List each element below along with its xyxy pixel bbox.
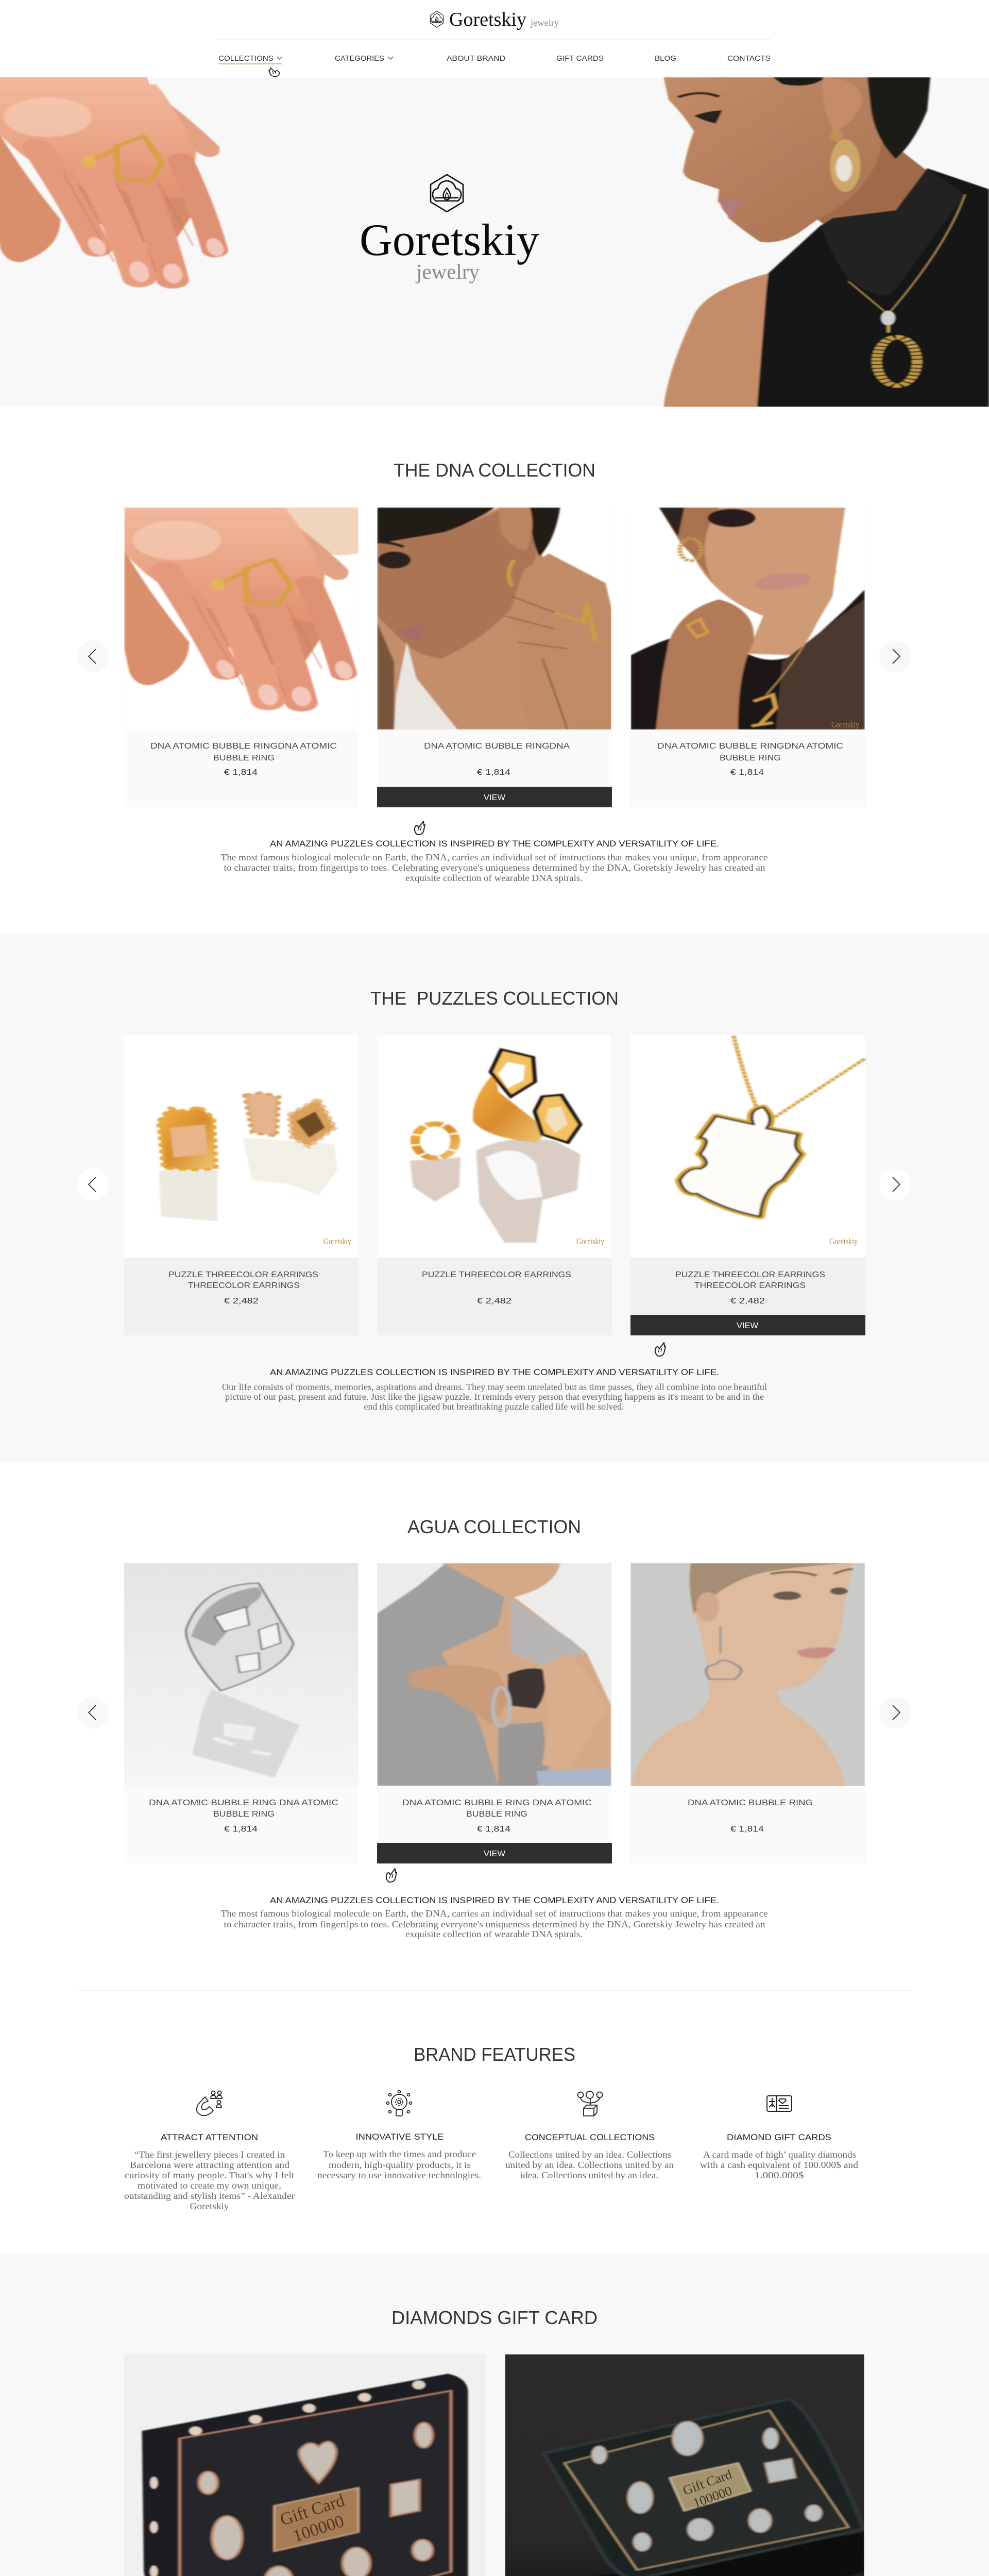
description: Our life consists of moments, memories, aspirations and dreams. They may seem unrelated but as time passes, they all combine into one beautiful: [222, 1382, 767, 1392]
gift card 1: Gift Card: [278, 2491, 347, 2530]
product card 3: Goretskiy: [831, 720, 859, 730]
icon: hand cursor: [269, 68, 279, 77]
product card 3: € 1,814: [730, 1825, 764, 1834]
button: view: [377, 787, 612, 807]
hero photo: woman in profile: [663, 77, 989, 407]
product card 2: € 2,482: [477, 1297, 511, 1306]
feature: conceptual collections: united by an idea. Collections united by an: [505, 2160, 674, 2170]
feature: diamond gift cards: DIAMOND GIFT CARDS: [727, 2132, 831, 2142]
arrow: previous: [77, 1168, 109, 1200]
icon: magnet and people: [197, 2091, 222, 2115]
description: to character traits, from fingertips to toes. Celebrating everyone's uniqueness determined by the DNA, Goretskiy Jewelry has created an: [224, 862, 765, 873]
product card 2: BUBBLE RING: [466, 1810, 527, 1819]
description: [220, 839, 768, 883]
product card 3: PUZZLE THREECOLOR EARRINGS: [675, 1270, 825, 1279]
icon: hand cursor: [415, 821, 425, 835]
product card 3: € 2,482: [730, 1297, 765, 1306]
logo: header: Goretskiy: [449, 9, 526, 30]
feature: attract attention: [124, 2091, 295, 2211]
product card 1: PUZZLE THREECOLOR EARRINGS: [168, 1270, 318, 1279]
arrow: previous: [77, 640, 109, 672]
button: view: VIEW: [737, 1321, 759, 1330]
heading: DIAMONDS GIFT CARD: [391, 2307, 598, 2328]
product card 2: PUZZLE THREECOLOR EARRINGS: [422, 1270, 571, 1279]
description: AN AMAZING PUZZLES COLLECTION IS INSPIRED BY THE COMPLEXITY AND VERSATILITY OF LIFE.: [270, 1895, 719, 1905]
feature: diamond gift cards: A card made of high’ quality diamonds: [703, 2149, 856, 2160]
description: The most famous biological molecule on Earth, the DNA, carries an individual set of instructions that makes you unique, from appearance: [220, 852, 768, 862]
navigation: [218, 54, 771, 64]
product card 2: [377, 507, 612, 807]
section: the puzzles collection: [77, 988, 911, 1412]
hero logo: Goretskiy: [360, 215, 539, 265]
hero logo: jewelry: [415, 260, 480, 283]
product card 2: Goretskiy: [578, 720, 605, 730]
product card 1: BUBBLE RING: [213, 1810, 275, 1819]
feature: attract attention: “The first jewellery pieces I created in: [134, 2149, 285, 2160]
feature: conceptual collections: [505, 2091, 674, 2180]
gift card 2: 100000: [691, 2483, 734, 2511]
arrow: next: [879, 1697, 911, 1728]
product card 3: Goretskiy: [829, 1236, 858, 1246]
product card 3: [630, 1035, 865, 1335]
section: agua collection: [77, 1516, 911, 1939]
heading: THE DNA COLLECTION: [394, 460, 595, 481]
gift card 2: Gift Card: [681, 2467, 734, 2498]
navigation: CONTACTS: [727, 54, 771, 63]
arrow: next: [879, 1168, 911, 1200]
feature: conceptual collections: idea. Collections united by an idea.: [520, 2170, 658, 2180]
feature: attract attention: Goretskiy: [190, 2201, 229, 2211]
product card 1: € 1,814: [224, 768, 258, 777]
product card 2: € 1,814: [477, 768, 510, 777]
navigation: CATEGORIES: [335, 54, 384, 63]
icon: light bulb with gear: [386, 2091, 412, 2116]
icon: hand cursor: [655, 1343, 666, 1356]
gift card 2: [504, 2354, 865, 2576]
description: [222, 1367, 767, 1412]
description: picture of our past, present and future. Just like the jigsaw puzzle. It reminds every person that everything happens as it's meant to be and in the: [225, 1392, 764, 1402]
product card 1: THREECOLOR EARRINGS: [188, 1281, 300, 1290]
navigation: ABOUT BRAND: [447, 54, 505, 63]
description: AN AMAZING PUZZLES COLLECTION IS INSPIRED BY THE COMPLEXITY AND VERSATILITY OF LIFE.: [270, 839, 719, 849]
product card 2: Goretskiy: [576, 1236, 604, 1246]
product card 3: € 1,814: [730, 768, 764, 777]
button: view: [377, 1843, 612, 1863]
product card 1: [124, 1563, 359, 1863]
section: the DNA collection: [77, 460, 911, 883]
hero photo: hand with ring: [0, 77, 226, 284]
feature: diamond gift cards: with a cash equivalent of 100.000$ and: [700, 2160, 858, 2170]
product card 2: [377, 1563, 612, 1863]
feature: attract attention: Barcelona were attracting attention and: [130, 2160, 289, 2170]
product card 2: [377, 1035, 612, 1335]
button: view: VIEW: [484, 793, 506, 802]
icon: gift card: [767, 2096, 792, 2111]
description: exquisite collection of wearable DNA spirals.: [405, 873, 583, 883]
navigation: COLLECTIONS: [218, 54, 274, 63]
feature: innovative style: INNOVATIVE STYLE: [355, 2132, 444, 2142]
gift card 1: 100000: [291, 2512, 347, 2546]
product card 3: [630, 507, 865, 776]
icon: box with sprouting ideas: [578, 2091, 603, 2116]
product card 1: DNA ATOMIC BUBBLE RING DNA ATOMIC: [149, 1799, 338, 1807]
product card 1: € 2,482: [224, 1297, 259, 1306]
logo: header: [430, 9, 559, 30]
arrow: previous: [77, 1697, 109, 1728]
product card 3: THREECOLOR EARRINGS: [694, 1281, 806, 1290]
section: brand features: [124, 2044, 858, 2211]
description: [220, 1895, 768, 1939]
product card 2: € 1,814: [477, 1825, 510, 1834]
icon: hand cursor: [386, 1869, 397, 1882]
product card 1: [124, 507, 359, 776]
feature: innovative style: modern, high-quality products, it is: [329, 2160, 471, 2170]
navigation: BLOG: [655, 54, 676, 63]
product card 3: DNA ATOMIC BUBBLE RINGDNA ATOMIC: [657, 742, 843, 751]
arrow: next: [879, 640, 911, 672]
feature: innovative style: [317, 2091, 481, 2180]
description: end this complicated but breathtaking puzzle called life will be solved.: [364, 1401, 624, 1412]
hero logo: [360, 175, 539, 283]
navigation: GIFT CARDS: [556, 54, 604, 63]
gift card 1: [124, 2354, 486, 2576]
product card 1: DNA ATOMIC BUBBLE RINGDNA ATOMIC: [150, 742, 337, 751]
feature: diamond gift cards: [700, 2096, 858, 2180]
product card 1: € 1,814: [224, 1825, 258, 1834]
description: exquisite collection of wearable DNA spirals.: [405, 1929, 583, 1939]
product card 3: BUBBLE RING: [720, 754, 781, 762]
feature: attract attention: ATTRACT ATTENTION: [161, 2132, 258, 2142]
product card 1: Goretskiy: [323, 1236, 351, 1246]
product card 3: [630, 1563, 865, 1833]
button: view: [630, 1315, 865, 1335]
heading: BRAND FEATURES: [414, 2044, 575, 2065]
product card 2: DNA ATOMIC BUBBLE RING DNA ATOMIC: [402, 1799, 592, 1807]
hero banner: [0, 77, 989, 407]
feature: attract attention: curiosity of many people. That's why I felt: [125, 2170, 294, 2180]
logo: header: jewelry: [530, 18, 559, 28]
feature: innovative style: necessary to use innovative technologies.: [317, 2170, 481, 2180]
product card 2: DNA ATOMIC BUBBLE RINGDNA: [424, 742, 570, 751]
button: view: VIEW: [484, 1850, 506, 1858]
feature: conceptual collections: CONCEPTUAL COLLECTIONS: [525, 2132, 655, 2142]
heading: THE PUZZLES COLLECTION: [370, 988, 619, 1009]
product card 1: [124, 1035, 359, 1335]
feature: conceptual collections: Collections united by an idea. Collections: [508, 2149, 671, 2160]
header: [218, 9, 771, 77]
product card 3: DNA ATOMIC BUBBLE RING: [688, 1799, 813, 1807]
description: AN AMAZING PUZZLES COLLECTION IS INSPIRED BY THE COMPLEXITY AND VERSATILITY OF LIFE.: [270, 1367, 719, 1377]
description: to character traits, from fingertips to toes. Celebrating everyone's uniqueness determined by the DNA, Goretskiy Jewelry has created an: [224, 1919, 765, 1929]
heading: AGUA COLLECTION: [407, 1516, 581, 1537]
feature: innovative style: To keep up with the times and produce: [323, 2149, 476, 2159]
feature: diamond gift cards: 1.000.000$: [754, 2170, 804, 2180]
description: The most famous biological molecule on Earth, the DNA, carries an individual set of instructions that makes you unique, from appearance: [220, 1908, 768, 1919]
product card 1: BUBBLE RING: [213, 754, 275, 762]
feature: attract attention: outstanding and stylish items” - Alexander: [124, 2191, 295, 2201]
section: diamonds gift card: [124, 2307, 865, 2576]
feature: attract attention: motivated to create my own unique,: [138, 2180, 281, 2191]
